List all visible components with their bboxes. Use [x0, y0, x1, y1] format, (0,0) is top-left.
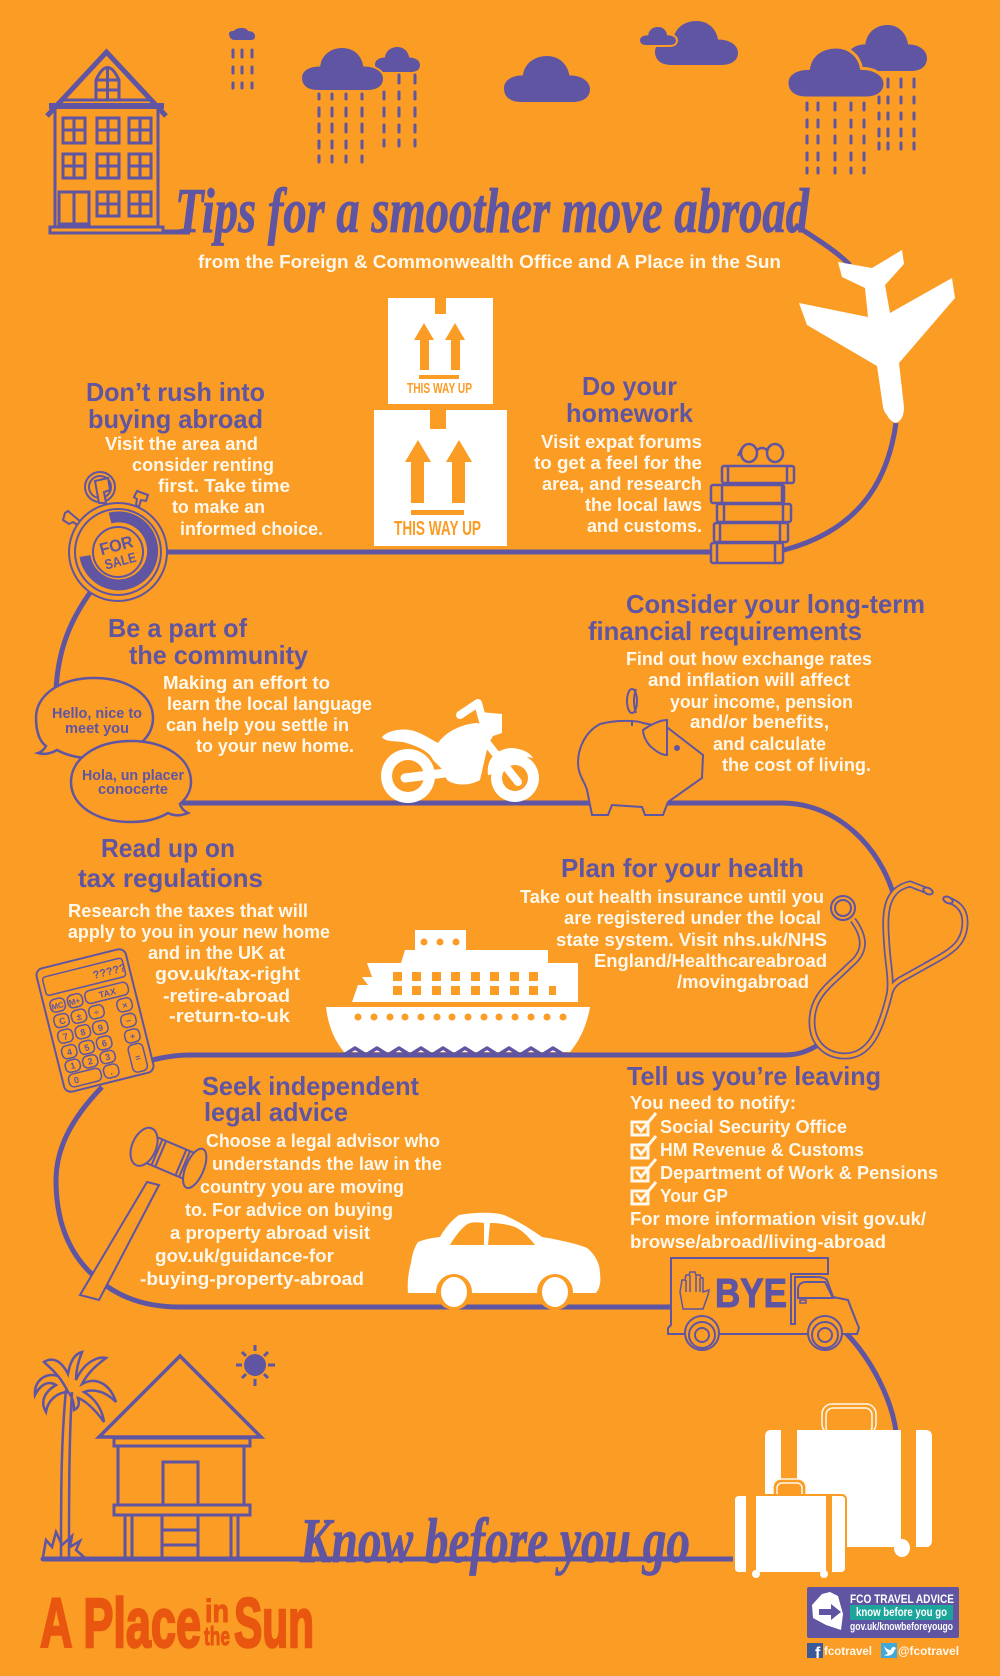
- logo: a place in the sun: A Place: [40, 1584, 201, 1662]
- heading: Tell us you’re leaving: [627, 1061, 881, 1091]
- body text: the cost of living.: [722, 755, 871, 775]
- panel: be a part of the community: [108, 613, 372, 756]
- body text: [534, 432, 702, 536]
- body text: You need to notify:: [630, 1093, 796, 1113]
- small box: [388, 298, 493, 404]
- calculator labels: ?????: [92, 962, 128, 982]
- body text: England/Healthcareabroad: [594, 951, 827, 971]
- icon: removal truck bye: [668, 1258, 859, 1350]
- body text: area, and research: [542, 474, 702, 494]
- palm tree: [35, 1352, 116, 1558]
- body text: to make an: [172, 497, 265, 517]
- social: facebook: [807, 1643, 872, 1662]
- wheels: [685, 1316, 842, 1350]
- for sale label: [97, 532, 139, 573]
- heading: Be a part of: [108, 613, 247, 643]
- calculator labels: .: [109, 1066, 114, 1077]
- heading: Don’t rush into: [86, 377, 265, 407]
- badge: fco travel advice: [807, 1587, 959, 1638]
- calculator labels: −: [125, 1015, 132, 1026]
- icon: suitcases: [733, 1404, 932, 1578]
- icon: gavel: [80, 1123, 211, 1300]
- calculator labels: 1: [69, 1060, 76, 1071]
- body text: [105, 434, 323, 539]
- body text: Visit expat forums: [541, 432, 702, 452]
- heading: [202, 1071, 419, 1127]
- calculator labels: ±: [75, 1011, 83, 1022]
- body text: understands the law in the: [212, 1154, 442, 1174]
- bubble: hola: [71, 741, 191, 822]
- social: twitter: @fcotravel: [898, 1644, 959, 1658]
- calculator labels: =: [134, 1052, 142, 1063]
- body text: -buying-property-abroad: [140, 1269, 364, 1289]
- large suitcase: [765, 1404, 932, 1557]
- body text: -retire-abroad: [163, 986, 290, 1006]
- heading: financial requirements: [588, 616, 862, 646]
- heading: [108, 613, 309, 670]
- windows and portholes: [354, 938, 566, 1020]
- body text: a property abroad visit: [170, 1223, 370, 1243]
- body text: Choose a legal advisor who: [206, 1131, 440, 1151]
- icon: aeroplane: [799, 250, 955, 423]
- body text: and customs.: [587, 516, 702, 536]
- small rain cloud: [229, 28, 255, 88]
- calculator labels: 9: [97, 1022, 104, 1033]
- badge icon: [812, 1592, 843, 1630]
- body text: [626, 649, 872, 775]
- badge: fco travel advice: gov.uk/knowbeforeyougo: [850, 1621, 953, 1633]
- sun: [236, 1345, 275, 1386]
- calculator labels: 8: [79, 1027, 87, 1038]
- icon: motorcycle: [381, 703, 539, 803]
- heading: Consider your long-term: [626, 589, 925, 619]
- calculator labels: ÷: [93, 1007, 100, 1018]
- panel: long-term financial requirements: [588, 589, 925, 775]
- for sale label: FOR: [97, 532, 135, 559]
- body text: [520, 887, 827, 992]
- heading: [566, 371, 694, 428]
- panel: don't rush: [86, 377, 323, 539]
- body text: and calculate: [713, 734, 826, 754]
- for sale label: SALE: [103, 549, 138, 573]
- heading: [588, 589, 925, 646]
- heading: buying abroad: [88, 404, 263, 434]
- calculator labels: ×: [121, 1000, 129, 1011]
- calculator labels: 3: [104, 1052, 111, 1062]
- subtitle: from the Foreign & Commonwealth Office and A Place in the Sun: [198, 252, 781, 272]
- icon: calculator: [35, 948, 155, 1093]
- body text: HM Revenue & Customs: [660, 1140, 864, 1160]
- calculator labels: +: [129, 1031, 136, 1042]
- large box: THIS WAY UP: [394, 518, 481, 540]
- heading: legal advice: [204, 1097, 348, 1127]
- calculator labels: M+: [68, 996, 81, 1008]
- heading: Do your: [582, 371, 677, 401]
- waves: [344, 1048, 564, 1055]
- body text: Take out health insurance until you: [520, 887, 824, 907]
- body text: and inflation will affect: [648, 670, 850, 690]
- body text: your income, pension: [670, 692, 853, 712]
- bubble: hello: meet you: [65, 720, 129, 737]
- body text: Your GP: [660, 1186, 728, 1206]
- calculator labels: 7: [62, 1031, 69, 1042]
- hut: [99, 1356, 261, 1558]
- social: facebook: fcotravel: [824, 1644, 872, 1658]
- small box: THIS WAY UP: [407, 380, 472, 397]
- body text: informed choice.: [180, 519, 323, 539]
- checkboxes: [632, 1113, 656, 1204]
- body text: Research the taxes that will: [68, 901, 308, 921]
- body text: can help you settle in: [166, 715, 349, 735]
- bye lettering: BYE: [715, 1270, 787, 1316]
- bubble: hello: Hello, nice to: [52, 705, 142, 722]
- icon: car: [408, 1213, 600, 1310]
- body text: state system. Visit nhs.uk/NHS: [556, 930, 827, 950]
- bubble: hello: [36, 678, 153, 758]
- body text: gov.uk/tax-right: [155, 964, 300, 984]
- body text: [630, 1093, 938, 1252]
- social: facebook: f: [815, 1645, 821, 1662]
- icon: townhouse: [47, 52, 166, 233]
- rain clouds: [229, 21, 927, 173]
- body text: For more information visit gov.uk/: [630, 1209, 926, 1229]
- icon: books and glasses: [711, 444, 794, 563]
- icon: stethoscope: [812, 884, 965, 1056]
- heading: Plan for your health: [561, 853, 804, 883]
- body text: Find out how exchange rates: [626, 649, 872, 669]
- icon: cruise ship: [326, 930, 590, 1055]
- body text: are registered under the local: [564, 908, 821, 928]
- panel: tell us you're leaving: [627, 1061, 938, 1252]
- body text: to your new home.: [196, 736, 354, 756]
- panel: plan for your health: [520, 853, 827, 992]
- panel: seek independent legal advice: [140, 1071, 442, 1289]
- body text: -return-to-uk: [169, 1006, 291, 1026]
- body text: [140, 1131, 442, 1289]
- body text: to. For advice on buying: [185, 1200, 393, 1220]
- speech bubbles: [36, 678, 191, 822]
- route line: [43, 225, 896, 1559]
- heading: tax regulations: [78, 863, 263, 893]
- calculator labels: 0: [73, 1075, 80, 1086]
- body text: browse/abroad/living-abroad: [630, 1232, 886, 1252]
- body text: the local laws: [585, 495, 702, 515]
- logo: a place in the sun: in: [205, 1593, 229, 1629]
- icon: stopwatch for sale: [63, 472, 167, 601]
- body text: and in the UK at: [148, 943, 285, 963]
- heading: [86, 377, 265, 434]
- body text: consider renting: [132, 455, 274, 475]
- calculator labels: 5: [83, 1042, 91, 1053]
- calculator labels: 6: [101, 1038, 108, 1049]
- panel: read up on tax regulations: [68, 833, 330, 1026]
- body text: first. Take time: [158, 476, 290, 496]
- bubble: hola: conocerte: [98, 781, 168, 798]
- small suitcase: [733, 1479, 847, 1578]
- calculator labels: TAX: [98, 986, 117, 1000]
- badge: fco travel advice: know before you go: [856, 1605, 947, 1619]
- icon: boxes this way up: [374, 298, 507, 546]
- calculator labels: C: [58, 1015, 67, 1027]
- heading: [78, 833, 263, 893]
- body text: Visit the area and: [105, 434, 258, 454]
- badge: fco travel advice: FCO TRAVEL ADVICE: [850, 1592, 954, 1606]
- body text: to get a feel for the: [534, 453, 702, 473]
- body text: Making an effort to: [163, 673, 330, 693]
- body text: and/or benefits,: [690, 712, 829, 732]
- icon: piggy bank: [578, 689, 703, 815]
- closing title: Know before you go: [299, 1505, 690, 1576]
- body text: [68, 901, 330, 1026]
- calculator labels: 4: [66, 1047, 73, 1058]
- body text: Department of Work & Pensions: [660, 1163, 938, 1183]
- calculator labels: 2: [87, 1056, 94, 1067]
- bubble: hola: Hola, un placer: [82, 767, 184, 784]
- logo: a place in the sun: the: [204, 1621, 230, 1651]
- body text: country you are moving: [200, 1177, 404, 1197]
- body text: [163, 673, 372, 756]
- heading: the community: [129, 640, 309, 670]
- panel: do your homework: [534, 371, 702, 536]
- large box: [374, 410, 507, 546]
- logo: a place in the sun: Sun: [234, 1584, 314, 1662]
- far right rain clouds: [787, 25, 927, 173]
- body text: Social Security Office: [660, 1117, 847, 1137]
- heading: Seek independent: [202, 1071, 419, 1101]
- centre cloud: [504, 56, 590, 102]
- heading: homework: [566, 398, 694, 428]
- heading: Read up on: [101, 833, 235, 863]
- body text: apply to you in your new home: [68, 922, 330, 942]
- calculator labels: MC: [51, 1000, 65, 1012]
- calculator labels: [45, 962, 151, 1087]
- rain cloud pair: [301, 47, 420, 162]
- hand: [680, 1272, 709, 1309]
- upper right clouds: [639, 21, 738, 65]
- body text: gov.uk/guidance-for: [155, 1246, 334, 1266]
- body text: /movingabroad: [677, 972, 809, 992]
- body text: learn the local language: [167, 694, 372, 714]
- icon: hut, palm and sun: [35, 1345, 275, 1558]
